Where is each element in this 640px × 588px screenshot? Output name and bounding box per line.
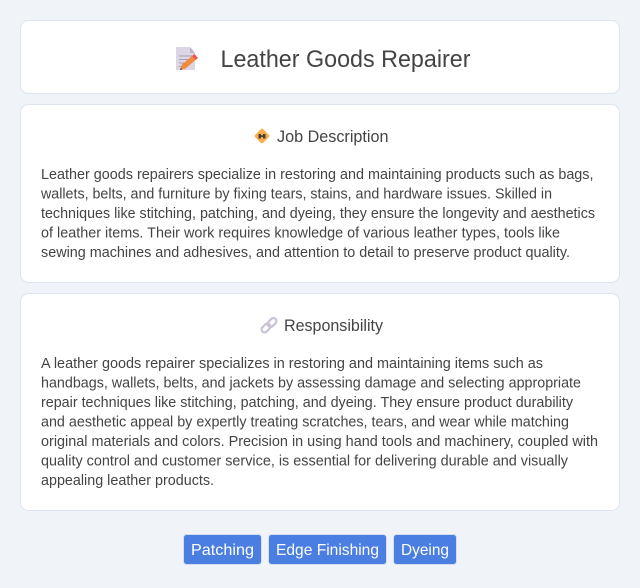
tag: patching: Patching <box>191 542 254 559</box>
tag: edge finishing <box>268 534 386 564</box>
text block: responsibility: appealing leather products. <box>41 473 214 489</box>
panel: responsibility <box>20 294 620 510</box>
heading: job description: Job Description <box>277 128 388 146</box>
text block: responsibility: repair techniques like stitching, patching, and dyeing. They ensure product durability <box>41 395 574 411</box>
text block: responsibility: and aesthetic appeal by expertly treating scratches, tears, and wear while matching <box>41 414 569 430</box>
text block: job description <box>40 167 595 261</box>
text block: responsibility <box>41 356 598 489</box>
text block: job description: sewing machines and adhesives, and attention to detail to preserve product quality. <box>41 245 570 261</box>
text block: job description: of leather items. Their work requires knowledge of various leather types, tools like <box>41 225 560 241</box>
panel: job description <box>20 104 620 282</box>
title text: Leather Goods Repairer <box>220 46 470 73</box>
icon: orange diamond <box>254 128 270 144</box>
tag: dyeing: Dyeing <box>401 542 449 559</box>
text block: job description: wallets, belts, and furniture by fixing tears, stains, and hardware issues. Skilled in <box>40 186 552 202</box>
text block: responsibility: A leather goods repairer specializes in restoring and maintaining items such as <box>41 356 543 372</box>
tag: edge finishing: Edge Finishing <box>276 542 379 559</box>
icon: chain link <box>260 317 278 334</box>
text block: responsibility: quality control and customer service, is essential for delivering durable and visually <box>41 454 569 470</box>
icon: memo with pencil <box>176 47 198 70</box>
tag: patching <box>184 534 262 564</box>
panel: title <box>20 20 620 94</box>
text block: responsibility: handbags, wallets, belts, and jackets by assessing damage and selecting appropriate <box>41 376 581 392</box>
text block: responsibility: original materials and colors. Precision in using hand tools and machinery, coupled with <box>41 434 598 450</box>
tags row <box>184 534 456 564</box>
text block: job description: Leather goods repairers specialize in restoring and maintaining products such as bags, <box>41 167 594 183</box>
heading: responsibility: Responsibility <box>284 317 384 335</box>
text block: job description: techniques like stitching, patching, and dyeing, they ensure the longevity and aesthetics <box>41 206 595 222</box>
tag: dyeing <box>394 534 456 564</box>
